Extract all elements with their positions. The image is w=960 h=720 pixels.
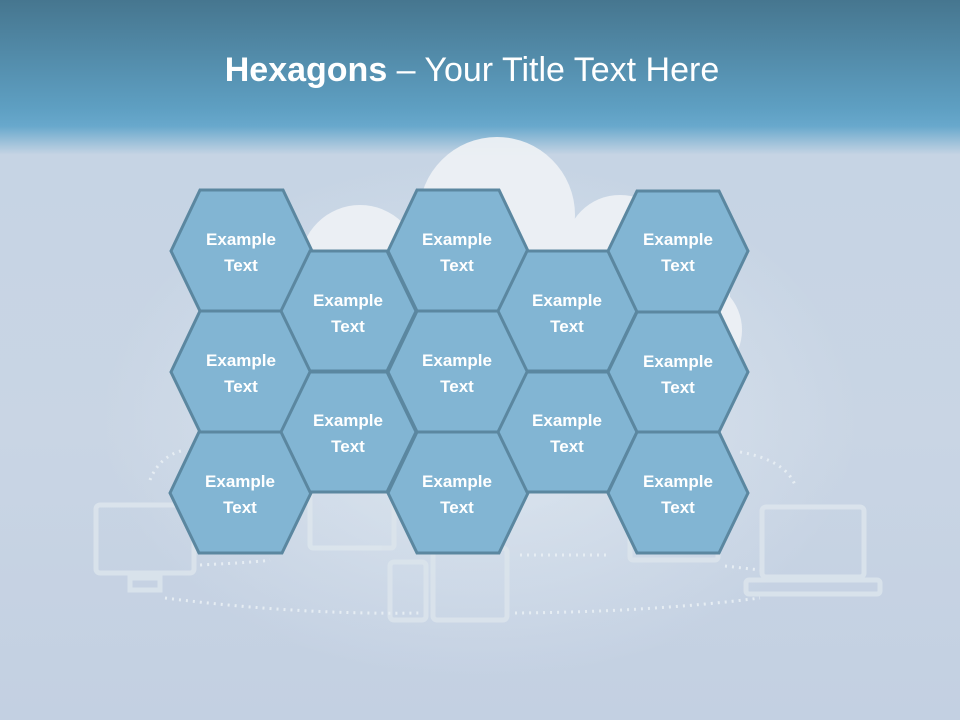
hex 9: Example	[532, 291, 602, 310]
hex 7: Example	[422, 351, 492, 370]
hex 6	[388, 190, 528, 311]
hex 8: Example	[422, 472, 492, 491]
hex 2: Example	[206, 351, 276, 370]
hex 9: Text	[550, 317, 584, 336]
hex 9	[498, 251, 637, 371]
hex 5	[281, 372, 416, 492]
hex 12: Example	[643, 352, 713, 371]
hex 3: Text	[223, 498, 257, 517]
hex 11: Text	[661, 256, 695, 275]
background cloud	[300, 137, 742, 410]
hex 13: Text	[661, 498, 695, 517]
hex 13	[608, 432, 748, 553]
hex 10	[498, 372, 637, 492]
hex 7	[388, 311, 528, 432]
hex 1: Text	[224, 256, 258, 275]
hex 1	[171, 190, 312, 311]
hexagon grid	[170, 190, 748, 553]
hex 4: Example	[313, 291, 383, 310]
hex 1: Example	[206, 230, 276, 249]
hex 10: Text	[550, 437, 584, 456]
hex 4: Text	[331, 317, 365, 336]
hex 11	[608, 191, 748, 312]
hex 10: Example	[532, 411, 602, 430]
hex 5: Example	[313, 411, 383, 430]
hex 8: Text	[440, 498, 474, 517]
hex 8	[388, 432, 528, 553]
hex 6: Example	[422, 230, 492, 249]
hex 12: Text	[661, 378, 695, 397]
title: Hexagons – Your Title Text Here	[225, 51, 719, 89]
hex 2	[171, 311, 312, 432]
hex 13: Example	[643, 472, 713, 491]
hex 4	[281, 251, 416, 371]
hex 2: Text	[224, 377, 258, 396]
hex 3: Example	[205, 472, 275, 491]
hex 3	[170, 432, 311, 553]
hex 11: Example	[643, 230, 713, 249]
hex 7: Text	[440, 377, 474, 396]
hex 6: Text	[440, 256, 474, 275]
background devices	[96, 490, 880, 620]
hex 5: Text	[331, 437, 365, 456]
hex 12	[608, 312, 748, 432]
